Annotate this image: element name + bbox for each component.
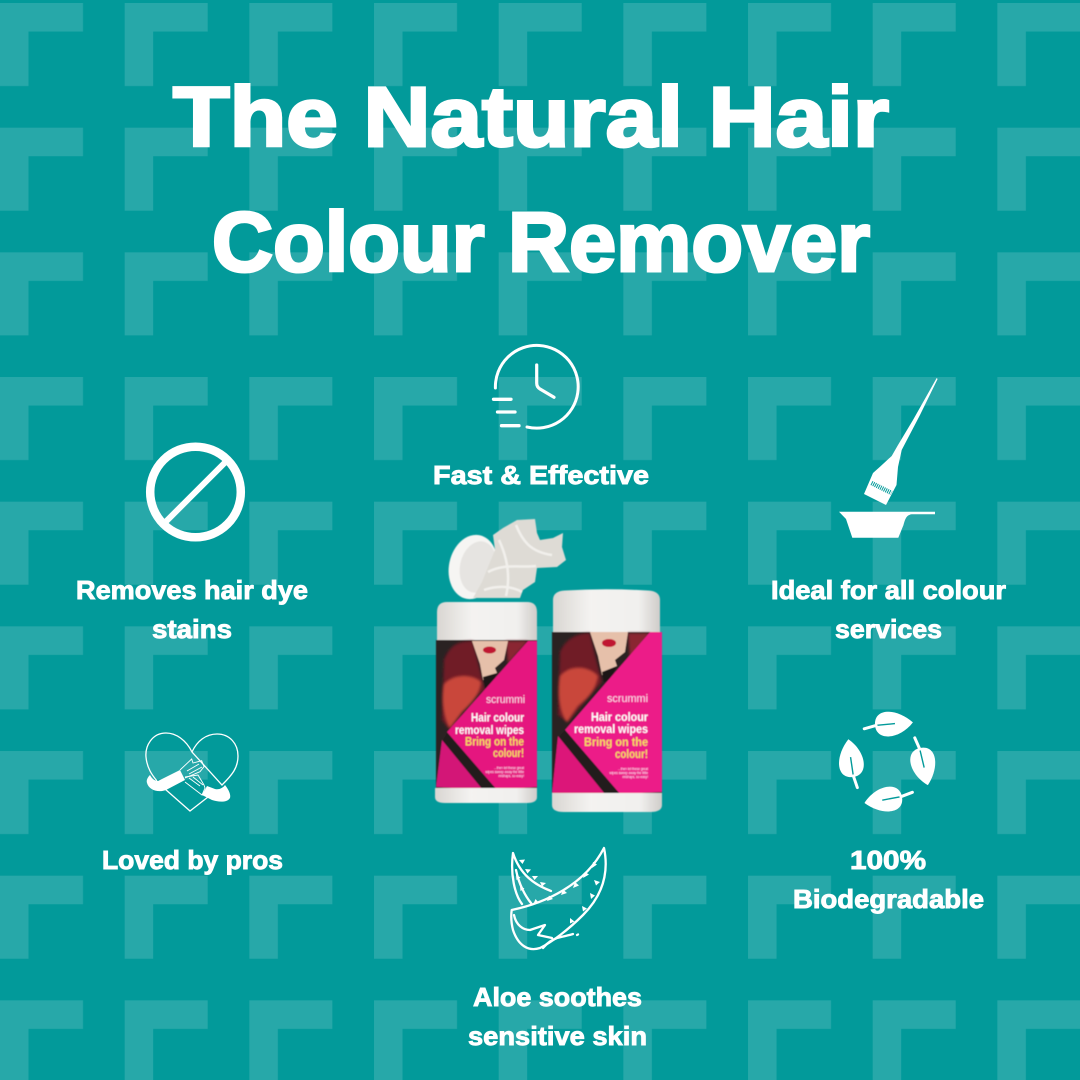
right tub: colour! — [615, 749, 648, 761]
right tub: Bring on the — [584, 737, 648, 749]
label: 100% biodegradable: 100% — [850, 845, 926, 875]
label: aloe soothes sensitive skin — [468, 982, 647, 1051]
left tub: mishaps, so easy! — [498, 774, 524, 778]
label: removes hair dye stains: Removes hair dye — [76, 575, 308, 605]
icon: four leaves in a circle — [836, 710, 940, 815]
label: removes hair dye stains — [76, 575, 308, 644]
label: ideal for all colour services: services — [835, 614, 942, 644]
icon: heart with hands — [146, 733, 238, 811]
feature: biodegradable — [793, 710, 984, 914]
right tub — [552, 589, 662, 812]
label: ideal for all colour services: Ideal for all colour — [771, 575, 1006, 605]
label: 100% biodegradable — [793, 845, 984, 914]
left tub: wipes sweep away the little — [486, 770, 524, 774]
right tub: mishaps, so easy! — [622, 775, 648, 779]
feature: aloe soothes sensitive skin — [468, 848, 647, 1051]
right tub: Hair colour — [591, 712, 648, 724]
feature: loved by pros — [102, 733, 283, 875]
right tub: ...then let these great — [618, 767, 648, 771]
icon: prohibition sign — [150, 447, 241, 537]
right tub: wipes sweep away the little — [610, 771, 648, 775]
left tub: Hair colour — [471, 713, 524, 725]
title — [173, 70, 889, 289]
title: Colour Remover — [212, 195, 870, 289]
label: aloe soothes sensitive skin: sensitive skin — [468, 1021, 647, 1051]
feature: removes hair dye stains — [76, 447, 308, 644]
open lid — [443, 530, 503, 604]
feature: fast and effective — [433, 345, 649, 490]
icon: aloe leaves — [511, 848, 606, 949]
left tub: Bring on the — [465, 736, 524, 748]
right tub: scrummi — [607, 693, 648, 705]
left tub: removal wipes — [455, 725, 524, 737]
label: removes hair dye stains: stains — [152, 614, 232, 644]
feature: ideal for all colour services — [771, 378, 1006, 644]
label: ideal for all colour services — [771, 575, 1006, 644]
wipe tissue — [473, 519, 566, 598]
label: loved by pros: Loved by pros — [102, 845, 283, 875]
right tub: removal wipes — [574, 724, 648, 736]
label: 100% biodegradable: Biodegradable — [793, 884, 984, 914]
left tub — [435, 602, 537, 803]
left tub: colour! — [493, 748, 524, 760]
icon: clock — [494, 345, 578, 428]
left tub: scrummi — [486, 694, 525, 706]
label: aloe soothes sensitive skin: Aloe soothes — [473, 982, 642, 1012]
left tub: ...then let these great — [494, 766, 524, 770]
label: fast and effective: Fast & Effective — [433, 460, 649, 490]
title: The Natural Hair — [173, 70, 889, 164]
icon: tint brush and bowl — [839, 378, 938, 538]
product: two tubs of wipes — [435, 519, 662, 812]
